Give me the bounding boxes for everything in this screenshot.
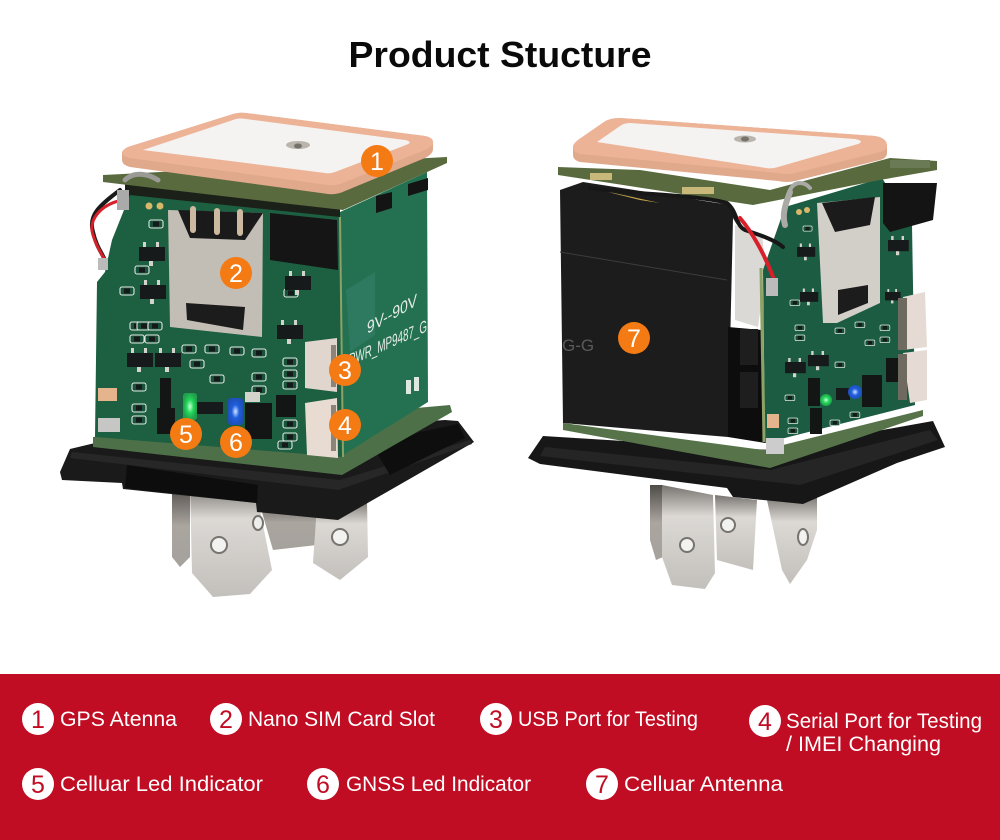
legend item 3: 3 <box>489 706 503 734</box>
title: Product Stucture <box>348 34 652 75</box>
dark gap under antenna board <box>125 180 340 222</box>
legend item 7: Celluar Antenna <box>624 773 783 796</box>
battery wires <box>92 174 158 432</box>
SIM card slot <box>168 206 263 337</box>
callout 4 <box>329 409 361 441</box>
serial connector <box>305 398 338 458</box>
black side blocks <box>728 327 765 443</box>
battery wires <box>590 183 810 454</box>
legend item 4: / IMEI Changing <box>786 733 941 756</box>
legend item 4: 4 <box>758 708 772 736</box>
product photo: front view <box>60 113 474 597</box>
callout 2: 2 <box>229 260 243 288</box>
legend item 3: USB Port for Testing <box>518 708 698 731</box>
side circuit board: 9V--90V <box>367 289 418 338</box>
legend item 3 <box>480 703 698 735</box>
metal terminals <box>172 485 368 597</box>
callout 6 <box>220 426 252 458</box>
battery black wrap <box>560 182 737 437</box>
legend item 5: Celluar Led Indicator <box>60 773 263 796</box>
legend item 1 <box>22 703 177 735</box>
legend item 2: 2 <box>219 706 233 734</box>
top circuit board strip <box>103 157 447 210</box>
callout 5 <box>170 418 202 450</box>
blue LED <box>228 398 243 425</box>
battery black wrap: G-G <box>562 336 594 355</box>
legend item 6: GNSS Led Indicator <box>346 773 531 796</box>
connector headers under board <box>376 178 428 213</box>
product photo: back view <box>528 118 945 589</box>
lower side connector <box>903 350 927 403</box>
circuit board <box>761 178 937 443</box>
callout 7 <box>618 322 650 354</box>
legend item 7: 7 <box>595 771 609 799</box>
black pin header <box>270 213 338 270</box>
callout 2 <box>220 257 252 289</box>
callout 5: 5 <box>179 421 193 449</box>
callout 1 <box>361 145 393 177</box>
SIM card slot <box>817 197 880 323</box>
bottom circuit board <box>93 405 452 475</box>
green LED <box>183 393 197 420</box>
legend item 5 <box>22 768 263 800</box>
blue LED <box>848 385 862 399</box>
USB connector <box>305 338 337 392</box>
callout 1: 1 <box>370 148 384 176</box>
GPS ceramic antenna <box>573 118 887 182</box>
legend item 4: Serial Port for Testing <box>786 710 982 733</box>
callout 3: 3 <box>338 357 352 385</box>
green LED <box>820 394 832 406</box>
main circuit board <box>95 195 343 457</box>
legend item 2 <box>210 703 435 735</box>
side circuit board: PWR_MP9487_G <box>349 316 427 371</box>
metal terminals <box>650 485 817 589</box>
legend item 4 <box>749 705 982 756</box>
black relay base <box>60 420 474 520</box>
callout 3 <box>329 354 361 386</box>
legend item 1: GPS Atenna <box>60 708 177 731</box>
legend item 1: 1 <box>31 706 45 734</box>
legend item 7 <box>586 768 783 800</box>
bottom circuit board <box>563 410 923 468</box>
callout 4: 4 <box>338 412 352 440</box>
black relay base <box>528 421 945 504</box>
GPS ceramic antenna <box>122 113 433 194</box>
upper side connector <box>903 292 927 350</box>
white battery side <box>735 225 766 327</box>
callout 7: 7 <box>627 325 641 353</box>
top circuit board strip <box>558 158 937 205</box>
legend panel <box>0 674 1000 840</box>
legend item 5: 5 <box>31 771 45 799</box>
pin header <box>883 183 937 232</box>
legend item 6: 6 <box>316 771 330 799</box>
callout 6: 6 <box>229 429 243 457</box>
legend item 6 <box>307 768 531 800</box>
legend item 2: Nano SIM Card Slot <box>248 708 435 731</box>
side circuit board <box>340 172 428 455</box>
small components <box>120 220 311 449</box>
